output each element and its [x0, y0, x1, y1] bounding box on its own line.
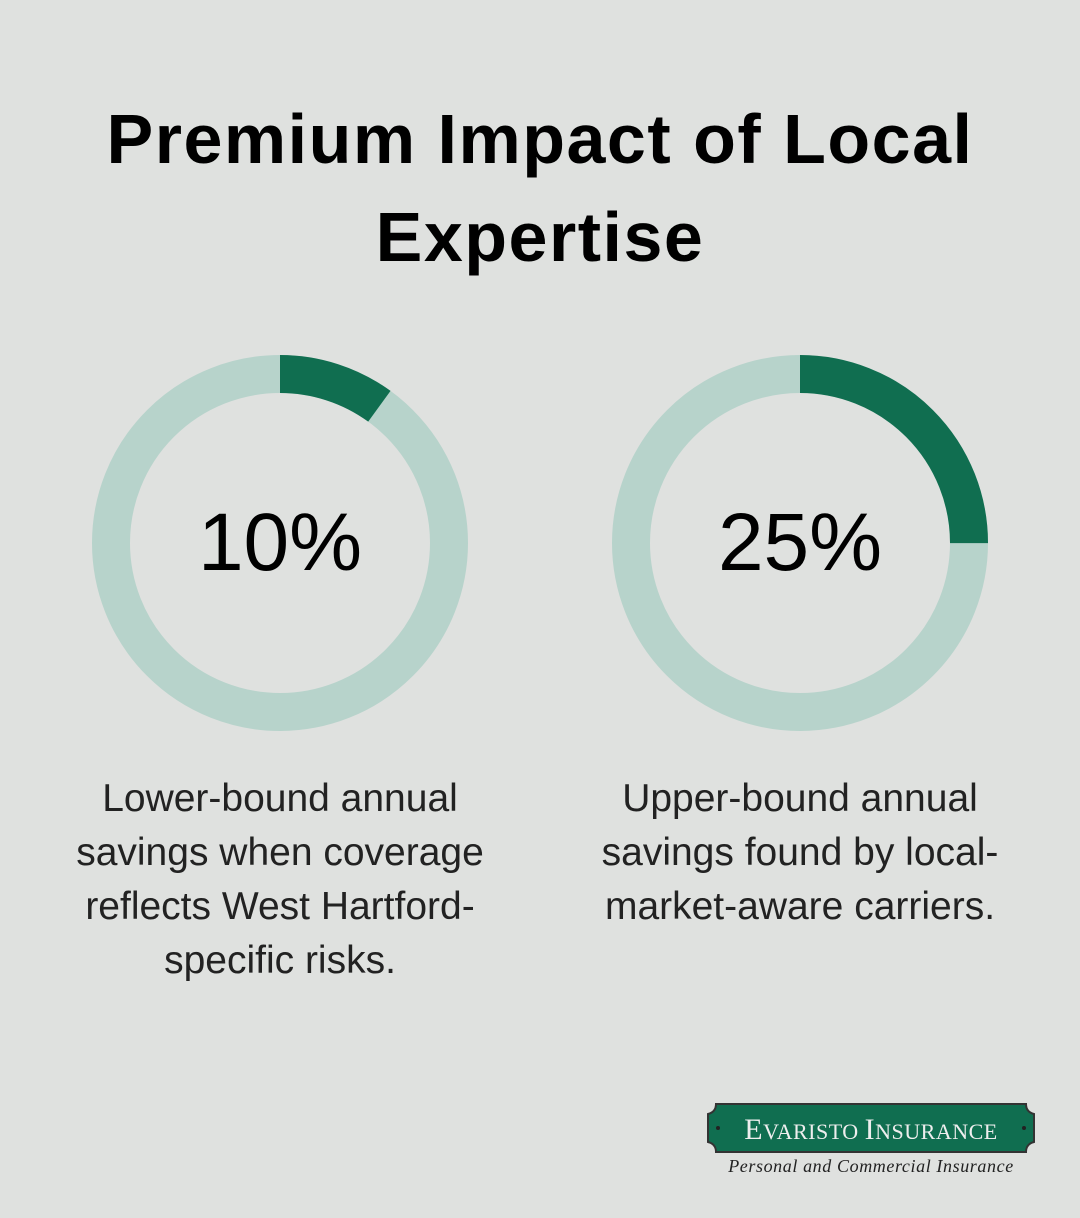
donut: 10% [92, 355, 468, 731]
caption right: Upper-bound annual savings found by local-market-aware carriers. [602, 777, 998, 928]
logo: Personal and Commercial Insurance [728, 1156, 1014, 1176]
donut: 25%: 25% [718, 497, 882, 588]
logo [707, 1103, 1035, 1176]
title [107, 100, 973, 276]
caption left: Lower-bound annual savings when coverage reflects West Hartford-specific risks. [76, 777, 484, 982]
donut: 10%: 10% [198, 497, 362, 588]
title: Expertise [376, 198, 704, 276]
title: Premium Impact of Local [107, 100, 973, 178]
logo: EVARISTO INSURANCE [744, 1113, 998, 1146]
donut: 25% [612, 355, 988, 731]
